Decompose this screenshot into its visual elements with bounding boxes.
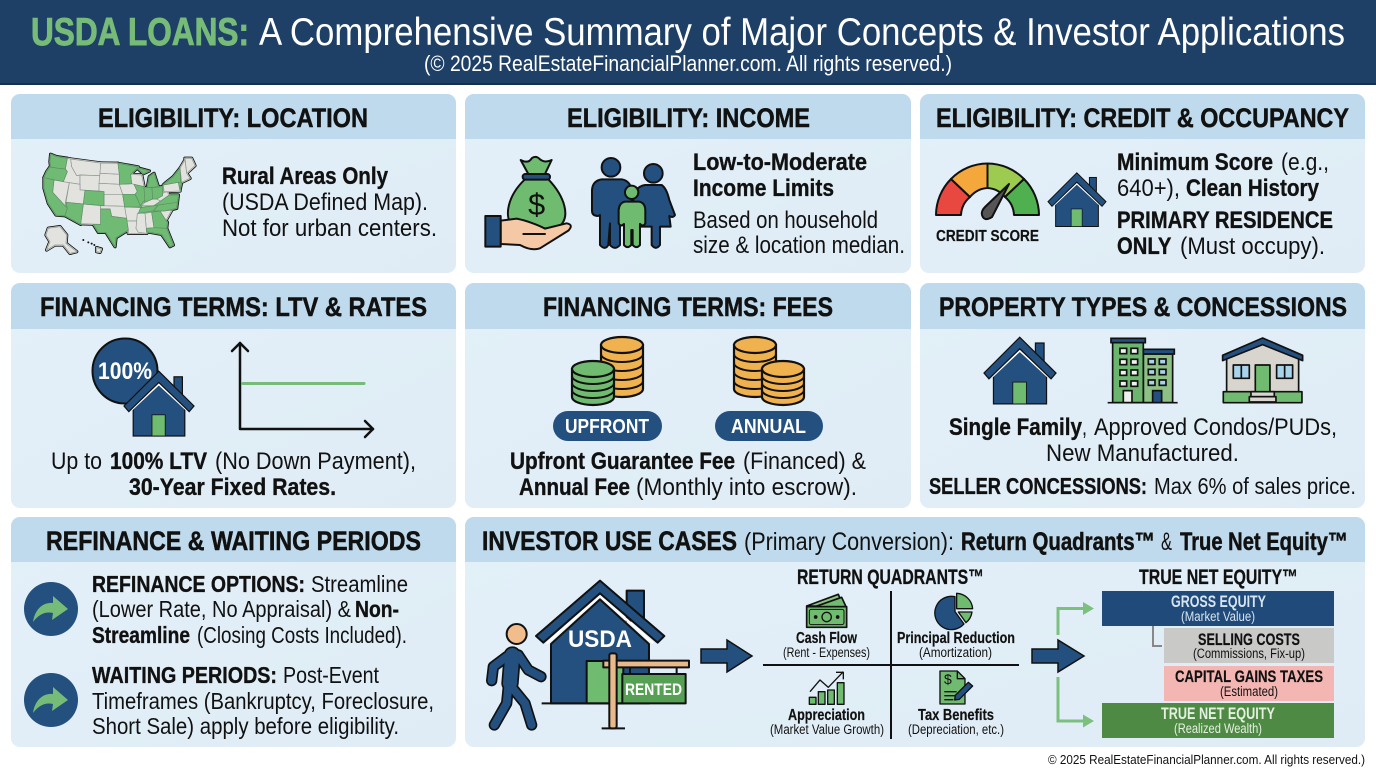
text block: 640+), — [1117, 175, 1180, 202]
panel: eligibility credit and occupancy — [920, 94, 1365, 273]
text: refinance options: Non- — [355, 596, 399, 622]
quadrant: appreciation: Appreciation — [788, 707, 865, 724]
panel: refinance and waiting periods — [11, 517, 456, 747]
text: waiting periods — [92, 662, 434, 739]
text: waiting periods: Timeframes (Bankruptcy, Foreclosure, — [92, 688, 434, 714]
text: waiting periods: Post-Event — [283, 662, 380, 688]
icon: USDA house with rented sign: RENTED — [625, 680, 682, 699]
heading: (Primary Conversion): — [744, 528, 954, 556]
heading: FINANCING TERMS: LTV & RATES — [40, 292, 427, 322]
text block: Up to — [51, 448, 102, 475]
gauge label: CREDIT SCORE — [936, 228, 1039, 245]
block: selling costs — [1164, 628, 1334, 663]
block: true net equity: TRUE NET EQUITY — [1161, 704, 1275, 723]
text block: , — [1082, 414, 1087, 441]
text block: (Financed) & — [743, 448, 866, 475]
text block: Not for urban centers. — [222, 215, 437, 242]
text block: Income Limits — [693, 175, 834, 202]
label: upfront: UPFRONT — [565, 416, 649, 438]
text: refinance options: (Closing Costs Included). — [197, 622, 407, 648]
quadrant: tax benefits — [908, 671, 1004, 737]
icon: manufactured home — [1223, 338, 1303, 403]
icon: US map — [44, 154, 195, 253]
text block — [929, 414, 1356, 499]
quadrant: tax benefits: Tax Benefits — [918, 707, 994, 724]
quadrants title: RETURN QUADRANTS™ — [797, 566, 984, 589]
block: gross equity — [1102, 591, 1334, 626]
quadrant: appreciation: (Market Value Growth) — [770, 722, 884, 737]
text block — [51, 448, 416, 501]
icon: money bag in hand — [485, 157, 571, 249]
heading: INVESTOR USE CASES — [482, 526, 737, 556]
text: refinance options: (Lower Rate, No Appraisal) & — [92, 596, 351, 622]
icon: 100% badge and house — [92, 338, 194, 436]
heading: Return Quadrants™ — [961, 528, 1155, 556]
text block: 100% LTV — [110, 448, 207, 475]
block: selling costs: (Commissions, Fix-up) — [1193, 646, 1305, 661]
title: USDA LOANS: — [31, 11, 249, 54]
text block: size & location median. — [693, 232, 905, 259]
text block: (No Down Payment), — [215, 448, 416, 475]
icon: waiting period arrow — [24, 673, 78, 727]
text: refinance options: Streamline — [311, 571, 408, 597]
text block: (Monthly into escrow). — [636, 474, 857, 501]
text: refinance options: REFINANCE OPTIONS: — [92, 571, 305, 597]
quadrant: cash flow — [783, 594, 870, 660]
text block: 30-Year Fixed Rates. — [129, 474, 336, 501]
text block — [222, 163, 437, 242]
heading: & — [1161, 528, 1172, 556]
heading: FINANCING TERMS: FEES — [543, 292, 833, 322]
quadrant: tax benefits: (Depreciation, etc.) — [908, 722, 1004, 737]
label: annual — [715, 411, 823, 441]
block: true net equity — [1102, 703, 1334, 738]
panel: eligibility income — [465, 94, 911, 273]
arrow — [1032, 640, 1084, 672]
text block: (e.g., — [1281, 149, 1329, 176]
icon: person walking — [492, 624, 541, 725]
text block: (USDA Defined Map). — [222, 189, 428, 216]
block: selling costs: SELLING COSTS — [1198, 630, 1300, 649]
text block: ONLY — [1117, 233, 1171, 260]
header banner — [0, 0, 1376, 85]
text block: New Manufactured. — [1046, 440, 1239, 467]
panel: investor use cases — [465, 517, 1365, 747]
text block: SELLER CONCESSIONS: — [929, 473, 1147, 499]
arrow — [701, 640, 752, 672]
text block — [1117, 149, 1333, 260]
icon: upfront coin stacks — [572, 337, 643, 405]
block: capital gains taxes: (Estimated) — [1220, 684, 1278, 699]
subtitle: (© 2025 RealEstateFinancialPlanner.com. All rights reserved.) — [424, 51, 952, 76]
text block: Rural Areas Only — [222, 163, 389, 190]
text: waiting periods: Short Sale) apply before eligibility. — [92, 713, 399, 739]
icon: annual coin stacks — [734, 337, 804, 405]
text block: Approved Condos/PUDs, — [1094, 414, 1337, 441]
quadrant: principal reduction — [897, 593, 1015, 660]
icon: credit score gauge — [936, 164, 1039, 245]
panel: property types and concessions — [920, 283, 1365, 508]
panel: eligibility location — [11, 94, 456, 273]
text block: PRIMARY RESIDENCE — [1117, 207, 1333, 234]
text block — [693, 149, 905, 259]
text block: Based on household — [693, 207, 878, 234]
heading: ELIGIBILITY: LOCATION — [98, 103, 368, 133]
text block: Single Family — [949, 414, 1083, 441]
icon: condo buildings — [1108, 338, 1178, 403]
icon: family — [592, 158, 675, 248]
icon: single family house — [984, 337, 1056, 404]
block: true net equity: (Realized Wealth) — [1174, 721, 1262, 736]
text block: Low-to-Moderate — [693, 149, 867, 176]
quadrant: appreciation — [770, 672, 884, 737]
quadrant: tax benefits: $ — [944, 671, 952, 687]
text: waiting periods: WAITING PERIODS: — [92, 662, 277, 688]
heading: REFINANCE & WAITING PERIODS — [46, 526, 421, 556]
icon: USDA house with rented sign: USDA — [568, 626, 632, 653]
quadrant: cash flow: (Rent - Expenses) — [783, 645, 870, 660]
label: upfront — [553, 411, 662, 441]
text: refinance options: Streamline — [92, 622, 190, 648]
icon: house — [1048, 173, 1106, 227]
arrows: green connectors to equity — [1058, 602, 1094, 728]
text block: Upfront Guarantee Fee — [510, 448, 735, 475]
text block: Annual Fee — [519, 474, 630, 501]
quadrant: cash flow: Cash Flow — [796, 630, 858, 647]
icon: USDA house with rented sign — [536, 581, 689, 728]
text block: Minimum Score — [1117, 149, 1273, 176]
text block — [510, 448, 866, 501]
heading: ELIGIBILITY: INCOME — [567, 103, 810, 133]
chart: return quadrants — [763, 566, 1019, 739]
quadrant: principal reduction: Principal Reduction — [897, 630, 1015, 647]
chart: flat fixed rate line — [232, 343, 373, 437]
icon: 100% badge and house: 100% — [98, 358, 152, 385]
block: capital gains taxes: CAPITAL GAINS TAXES — [1175, 667, 1323, 686]
text block: (Must occupy). — [1180, 233, 1325, 260]
icon: refinance arrow — [24, 582, 78, 636]
block: gross equity: GROSS EQUITY — [1171, 592, 1266, 611]
block: gross equity: (Market Value) — [1181, 609, 1255, 624]
quadrant: principal reduction: (Amortization) — [919, 645, 992, 660]
label: annual: ANNUAL — [731, 416, 806, 438]
panel: financing LTV and rates — [11, 283, 456, 508]
block: capital gains taxes — [1164, 666, 1334, 701]
icon: money bag in hand: $ — [528, 188, 545, 222]
panel: financing fees — [465, 283, 911, 508]
chart: true net equity — [1102, 566, 1334, 738]
equity title: TRUE NET EQUITY™ — [1139, 566, 1298, 589]
text: refinance options — [92, 571, 408, 648]
text block: Clean History — [1186, 175, 1320, 202]
